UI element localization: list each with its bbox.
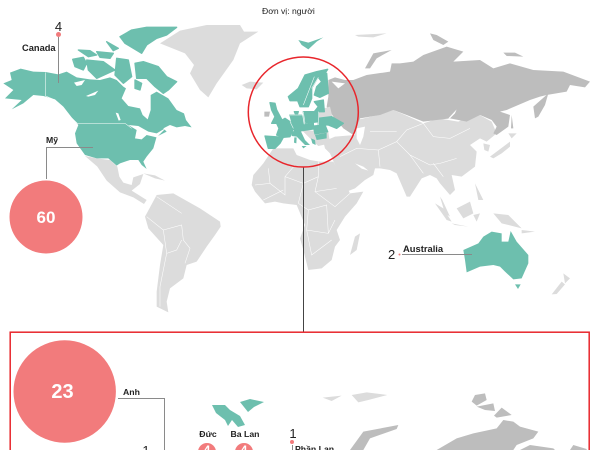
Romania (313, 125, 328, 134)
map: Europe (264, 69, 343, 148)
Finland value: 1 (289, 426, 297, 441)
Asia borders (340, 123, 470, 177)
US leader line (46, 148, 93, 179)
Ireland (264, 112, 270, 117)
Caribbean (143, 173, 165, 181)
unit note: Đơn vị: người (262, 6, 315, 16)
Arctic islets (323, 392, 387, 402)
Korea (483, 143, 490, 152)
Australia value: 2 (388, 247, 395, 262)
map: Americas and Greenland (85, 25, 263, 312)
Novaya Zemlya detail (350, 425, 398, 450)
callout: United States (10, 135, 93, 254)
Caspian Sea (357, 127, 365, 145)
map: Russia and Arctic (298, 33, 590, 135)
Australia label: Australia (403, 243, 444, 254)
Arctic islands (73, 27, 177, 93)
Iceland-side islet (242, 82, 263, 89)
Africa borders (255, 162, 350, 255)
Finland leader line (292, 445, 294, 450)
Austria and Czechia (293, 123, 313, 132)
Finland dot (290, 440, 294, 444)
Tasmania (515, 284, 521, 289)
Canada-US border (46, 72, 132, 128)
US label: Mỹ (46, 135, 58, 145)
France (277, 118, 293, 137)
Svalbard detail (212, 399, 264, 427)
Greenland (160, 25, 258, 97)
Europe borders (290, 77, 318, 128)
callout: Australia (388, 243, 472, 262)
Poland bubble (235, 443, 253, 450)
Poland label: Ba Lan (231, 429, 259, 439)
Germany label: Đức (199, 429, 217, 439)
Arctic islands (430, 33, 523, 57)
UK leader line (118, 398, 164, 450)
Southeast Asia and Japan islands (435, 133, 535, 233)
Mexico and Central America (85, 156, 147, 204)
Finland (314, 73, 328, 97)
South America (145, 193, 221, 312)
map: Eurasia (323, 110, 535, 233)
Canada value: 4 (55, 19, 62, 34)
callout: Canada (22, 19, 62, 83)
Norway and Sweden (288, 69, 328, 107)
Persian Gulf (355, 163, 368, 171)
Mediterranean islands (294, 137, 307, 148)
Canada label: Canada (22, 43, 56, 53)
connector line (302, 167, 304, 332)
Italy (292, 129, 310, 145)
Canada dot (56, 32, 61, 37)
Madagascar (350, 233, 360, 255)
Australia leader line (402, 254, 472, 256)
Ukraine (318, 117, 343, 128)
Africa landmass (252, 148, 363, 270)
map: Southern hemisphere (463, 231, 570, 294)
Great Lakes (128, 125, 167, 139)
UK label: Anh (123, 387, 140, 397)
Baltics (314, 100, 324, 112)
Svalbard (298, 37, 323, 49)
highlight circle: Europe (248, 57, 358, 167)
Germany bubble (198, 443, 216, 450)
US value: 60 (37, 208, 55, 227)
Australia dot (398, 254, 400, 256)
Europe background (302, 107, 332, 146)
map: Africa (252, 148, 363, 270)
world map (3, 25, 590, 312)
map: North America (3, 27, 192, 169)
White Sea and Lake Baikal (332, 82, 457, 118)
US bubble (10, 180, 82, 254)
Bulgaria and Greece (311, 133, 327, 145)
Russia (327, 47, 590, 135)
Poland (303, 112, 318, 123)
South America borders (147, 197, 190, 307)
Alaska, Canada and United States (3, 69, 192, 169)
UK bubble (13, 340, 116, 443)
New Zealand (552, 273, 570, 294)
Asia and Middle East (323, 110, 497, 197)
Sakhalin and Kamchatka (511, 93, 548, 128)
Iberia (265, 136, 283, 148)
Northern Russia detail (437, 420, 587, 450)
Franz Josef Land (472, 393, 512, 418)
Canada leader line (58, 37, 60, 83)
panel: Europe detail (10, 332, 589, 450)
Europe detail map (323, 392, 587, 450)
Denmark (294, 112, 298, 117)
panel frame (10, 332, 589, 450)
Germany (290, 115, 303, 128)
Novaya Zemlya (365, 50, 392, 68)
Canada lakes (74, 80, 121, 121)
Australia (463, 231, 528, 279)
UK value: 23 (51, 381, 74, 403)
Britain (270, 103, 282, 123)
